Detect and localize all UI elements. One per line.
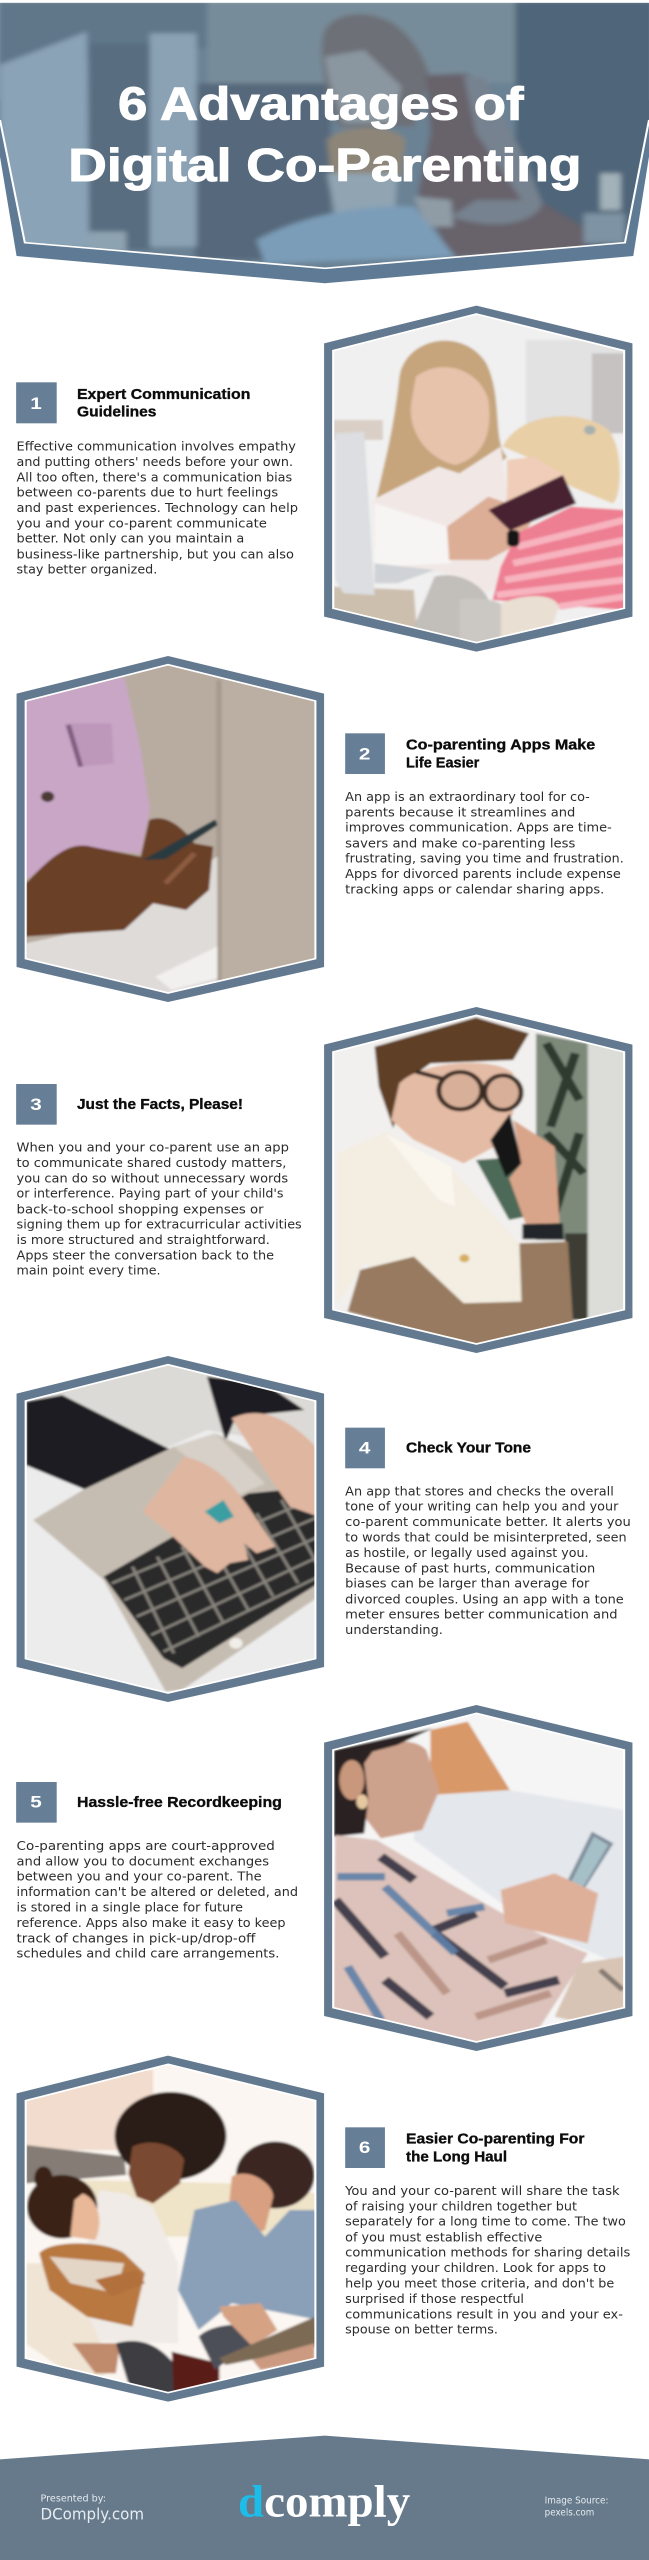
body text 3: to communicate shared custody matters,: [17, 1156, 286, 1171]
number badge 3: [16, 1084, 57, 1125]
presented by: DComply.com: [41, 2505, 144, 2524]
hexagon frame 3: [324, 1007, 632, 1353]
number badge 2: 2: [359, 744, 370, 763]
body text 1: Effective communication involves empathy: [17, 440, 296, 454]
body text 6: spouse on better terms.: [345, 2323, 498, 2337]
hexagon frame 6: [17, 2056, 324, 2402]
body text 3: [17, 1141, 302, 1278]
number badge 6: 6: [359, 2138, 370, 2157]
number badge 5: [16, 1782, 57, 1823]
heading 6: Easier Co-parenting For: [406, 2130, 585, 2147]
body text 2: [345, 790, 624, 897]
footer: [0, 2436, 649, 2560]
number badge 1: [16, 382, 57, 423]
body text 1: between co-parents due to hurt feelings: [17, 486, 278, 500]
heading 1: Expert Communication: [77, 386, 250, 403]
body text 1: [17, 440, 298, 577]
body text 6: [344, 2184, 630, 2337]
body text 4: [345, 1485, 631, 1638]
heading 1: [77, 386, 250, 420]
presented by: Presented by:: [41, 2493, 106, 2504]
section 3: just the facts: [16, 1007, 632, 1353]
body text 4: biases can be larger than average for: [345, 1577, 590, 1591]
heading 4: Check Your Tone: [406, 1439, 531, 1456]
body text 5: between you and your co-parent. The: [17, 1870, 262, 1884]
body text 2: parents because it streamlines and: [345, 806, 575, 820]
dcomply logo: dcomply: [238, 2477, 410, 2526]
hexagon frame 2: [17, 656, 324, 1002]
number badge 3: 3: [30, 1095, 42, 1114]
section 5: recordkeeping: [16, 1705, 632, 2051]
number badge 1: 1: [30, 394, 42, 413]
body text 2: An app is an extraordinary tool for co-: [345, 790, 590, 805]
header banner: [0, 0, 649, 283]
body text 6: of you must establish effective: [345, 2231, 542, 2245]
header photo: [0, 0, 649, 280]
heading 1: Guidelines: [77, 403, 156, 420]
hexagon frame 1: [324, 306, 632, 652]
body text 3: When you and your co-parent use an app: [17, 1141, 289, 1155]
body text 5: Co-parenting apps are court-approved: [17, 1839, 275, 1854]
body text 3: back-to-school shopping expenses or: [17, 1203, 264, 1217]
photo: hands typing on laptop: [26, 1366, 314, 1692]
section 1: expert communication: [16, 306, 632, 652]
body text 5: reference. Apps also make it easy to keep: [17, 1916, 286, 1931]
body text 3: Apps steer the conversation back to the: [17, 1249, 274, 1263]
body text 1: you and your co-parent communicate: [17, 517, 267, 531]
body text 6: of raising your children together but: [345, 2200, 577, 2214]
body text 3: main point every time.: [17, 1264, 161, 1278]
heading 2: Life Easier: [406, 754, 480, 771]
body text 3: is more structured and straightforward.: [17, 1233, 270, 1248]
body text 5: is stored in a single place for future: [17, 1901, 243, 1915]
image source: Image Source:: [545, 2494, 608, 2506]
body text 4: Because of past hurts, communication: [345, 1562, 595, 1576]
body text 4: as hostile, or legally used against you.: [345, 1546, 589, 1561]
photo: woman in plaid shirt using phone: [327, 1707, 629, 2047]
number badge 4: [345, 1428, 385, 1468]
body text 6: surprised if those respectful: [345, 2292, 524, 2307]
main title: 6 Advantages of: [118, 78, 524, 130]
section 4: check your tone: [17, 1356, 631, 1702]
section 2: apps make life easier: [17, 656, 624, 1002]
body text 4: understanding.: [345, 1623, 443, 1638]
main title: Digital Co-Parenting: [68, 139, 582, 192]
photo: family reading together: [26, 2065, 314, 2392]
hexagon frame 5: [324, 1705, 632, 2051]
photo: mother and child with phone: [327, 310, 629, 647]
number badge 4: 4: [359, 1439, 371, 1457]
body text 1: better. Not only can you maintain a: [17, 532, 244, 546]
heading 6: [406, 2130, 585, 2165]
hexagon frame 4: [17, 1356, 324, 1702]
section 6: long haul: [17, 2056, 630, 2402]
number badge 5: 5: [30, 1793, 42, 1811]
body text 3: or interference. Paying part of your child's: [17, 1187, 284, 1201]
heading 5: Hassle-free Recordkeeping: [77, 1794, 282, 1811]
body text 1: stay better organized.: [17, 563, 157, 577]
body text 1: and past experiences. Technology can help: [17, 501, 298, 516]
body text 1: and putting others' needs before your own.: [17, 455, 293, 470]
body text 1: business-like partnership, but you can also: [17, 548, 294, 562]
body text 5: and allow you to document exchanges: [17, 1855, 269, 1869]
presented by: [41, 2493, 144, 2524]
body text 5: [17, 1839, 298, 1961]
body text 5: track of changes in pick-up/drop-off: [17, 1932, 256, 1946]
image source: pexels.com: [545, 2506, 594, 2518]
body text 3: signing them up for extracurricular activities: [17, 1218, 302, 1232]
body text 5: information can't be altered or deleted, and: [17, 1885, 298, 1900]
number badge 2: [345, 733, 385, 774]
body text 1: All too often, there's a communication bias: [17, 471, 292, 485]
main title: [68, 78, 582, 192]
heading 6: the Long Haul: [406, 2148, 507, 2165]
number badge 6: [345, 2127, 385, 2168]
body text 5: schedules and child care arrangements.: [17, 1947, 279, 1961]
heading 2: Co-parenting Apps Make: [406, 736, 595, 753]
body text 3: you can do so without unnecessary words: [17, 1172, 288, 1186]
body text 2: savers and make co-parenting less: [345, 837, 575, 851]
photo: hands holding phone: [26, 666, 314, 992]
image source: [545, 2494, 608, 2518]
heading 2: [406, 736, 595, 771]
photo: woman with glasses on phone: [327, 1010, 629, 1350]
heading 3: Just the Facts, Please!: [77, 1096, 243, 1113]
body text 2: tracking apps or calendar sharing apps.: [345, 883, 604, 897]
